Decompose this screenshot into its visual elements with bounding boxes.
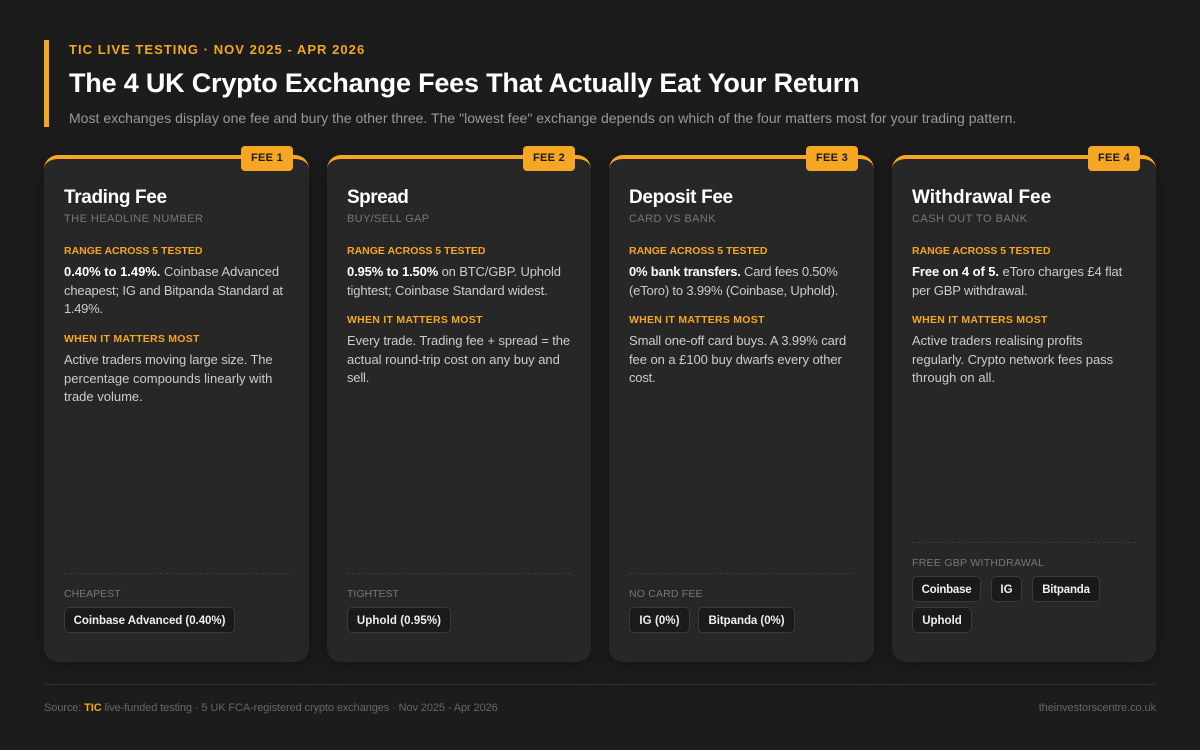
subheading: CARD VS BANK xyxy=(629,213,716,225)
text: when it matters: through on all. xyxy=(912,370,995,385)
chip: coinbase advanced xyxy=(64,607,235,633)
badge: fee 3: FEE 3 xyxy=(816,152,848,164)
title: The 4 UK Crypto Exchange Fees That Actually Eat Your Return xyxy=(69,68,859,98)
subtitle: Most exchanges display one fee and bury the other three. The "lowest fee" exchange depends on which of the four matters most for your trading pattern. xyxy=(69,110,1016,126)
subheading: THE HEADLINE NUMBER xyxy=(64,213,203,225)
label: tightest: TIGHTEST xyxy=(347,588,399,600)
label: cheapest: CHEAPEST xyxy=(64,588,121,600)
label: when it matters: WHEN IT MATTERS MOST xyxy=(347,314,483,326)
chip: uphold xyxy=(912,607,972,633)
label: when it matters: WHEN IT MATTERS MOST xyxy=(912,314,1048,326)
label: range: RANGE ACROSS 5 TESTED xyxy=(629,245,767,257)
text: when it matters: actual round-trip cost on any buy and xyxy=(347,352,560,366)
badge: fee 1 xyxy=(241,146,293,171)
badge: fee 2: FEE 2 xyxy=(533,152,565,164)
chip: bitpanda xyxy=(1032,576,1100,602)
text: range: 1.49%. xyxy=(64,301,103,316)
badge: fee 2 xyxy=(523,146,575,171)
text: range xyxy=(347,264,561,298)
text: range: per GBP withdrawal. xyxy=(912,282,1027,298)
chip: ig xyxy=(629,607,690,633)
text: range: cheapest; IG and Bitpanda Standard at xyxy=(64,282,283,298)
chip: coinbase xyxy=(912,576,981,602)
footer source: Source: TIC live-funded testing · 5 UK FCA-registered crypto exchanges · Nov 2025 - Apr 2026 xyxy=(44,702,498,714)
text: when it matters: cost. xyxy=(629,370,655,385)
chip: bitpanda: Bitpanda xyxy=(1042,584,1090,596)
label: range: RANGE ACROSS 5 TESTED xyxy=(912,245,1050,257)
text: range xyxy=(64,264,283,316)
text: when it matters: percentage compounds linearly with xyxy=(64,370,272,386)
panel: spread xyxy=(327,155,591,662)
badge: fee 4 xyxy=(1088,146,1140,171)
label: free gbp withdrawal: FREE GBP WITHDRAWAL xyxy=(912,557,1044,569)
heading: trading fee: Trading Fee xyxy=(64,187,167,208)
text: range: Free on 4 of 5. eToro charges £4 flat xyxy=(912,264,1122,279)
text: when it matters: fee on a £100 buy dwarfs every other xyxy=(629,352,842,366)
eyebrow: TIC LIVE TESTING · NOV 2025 - APR 2026 xyxy=(69,42,365,57)
heading: withdrawal fee: Withdrawal Fee xyxy=(912,187,1051,208)
text: range: tightest; Coinbase Standard widest. xyxy=(347,282,548,298)
chip: uphold: Uphold (0.95%) xyxy=(357,615,441,627)
panel: trading fee xyxy=(44,155,309,662)
label: no card fee: NO CARD FEE xyxy=(629,588,703,600)
heading: deposit fee: Deposit Fee xyxy=(629,187,733,208)
badge: fee 1: FEE 1 xyxy=(251,152,283,164)
footer site: theinvestorscentre.co.uk xyxy=(1039,702,1156,714)
label: range: RANGE ACROSS 5 TESTED xyxy=(347,245,485,257)
text: when it matters: Active traders moving large size. The xyxy=(64,352,272,367)
chip: ig xyxy=(991,576,1022,602)
text: range: 0.95% to 1.50% on BTC/GBP. Uphold xyxy=(347,264,561,279)
text: when it matters: regularly. Crypto network fees pass xyxy=(912,352,1113,366)
chip: coinbase: Coinbase xyxy=(922,584,971,596)
text: when it matters: Every trade. Trading fee + spread = the xyxy=(347,333,570,348)
chip: bitpanda xyxy=(698,607,795,633)
badge: fee 4: FEE 4 xyxy=(1098,152,1130,164)
chip: ig: IG (0%) xyxy=(639,615,680,627)
text: when it matters xyxy=(64,352,272,404)
badge: fee 3 xyxy=(806,146,858,171)
heading: spread: Spread xyxy=(347,187,408,208)
text: when it matters: trade volume. xyxy=(64,389,143,404)
text: when it matters: Small one-off card buys. A 3.99% card xyxy=(629,333,846,348)
chip: uphold: Uphold xyxy=(922,615,962,627)
text: range: 0.40% to 1.49%. Coinbase Advanced xyxy=(64,264,279,279)
text: range xyxy=(629,264,838,298)
chip: coinbase advanced: Coinbase Advanced (0.40%) xyxy=(74,615,225,627)
label: when it matters: WHEN IT MATTERS MOST xyxy=(64,333,200,345)
panel: withdrawal fee xyxy=(892,155,1156,662)
text: when it matters xyxy=(629,333,846,385)
text: range xyxy=(912,264,1122,298)
subheading: CASH OUT TO BANK xyxy=(912,213,1028,225)
label: when it matters: WHEN IT MATTERS MOST xyxy=(629,314,765,326)
text: when it matters: Active traders realising profits xyxy=(912,333,1083,348)
label: range: RANGE ACROSS 5 TESTED xyxy=(64,245,202,257)
header accent bar xyxy=(44,40,49,127)
text: when it matters xyxy=(347,333,570,385)
chip: uphold xyxy=(347,607,451,633)
text: when it matters xyxy=(912,333,1113,385)
chip: bitpanda: Bitpanda (0%) xyxy=(708,615,785,627)
subheading: BUY/SELL GAP xyxy=(347,213,429,225)
panel: deposit fee xyxy=(609,155,874,662)
text: range: 0% bank transfers. Card fees 0.50% xyxy=(629,264,838,279)
chip: ig: IG xyxy=(1000,584,1013,596)
text: when it matters: sell. xyxy=(347,370,369,385)
text: range: (eToro) to 3.99% (Coinbase, Uphold). xyxy=(629,282,838,298)
